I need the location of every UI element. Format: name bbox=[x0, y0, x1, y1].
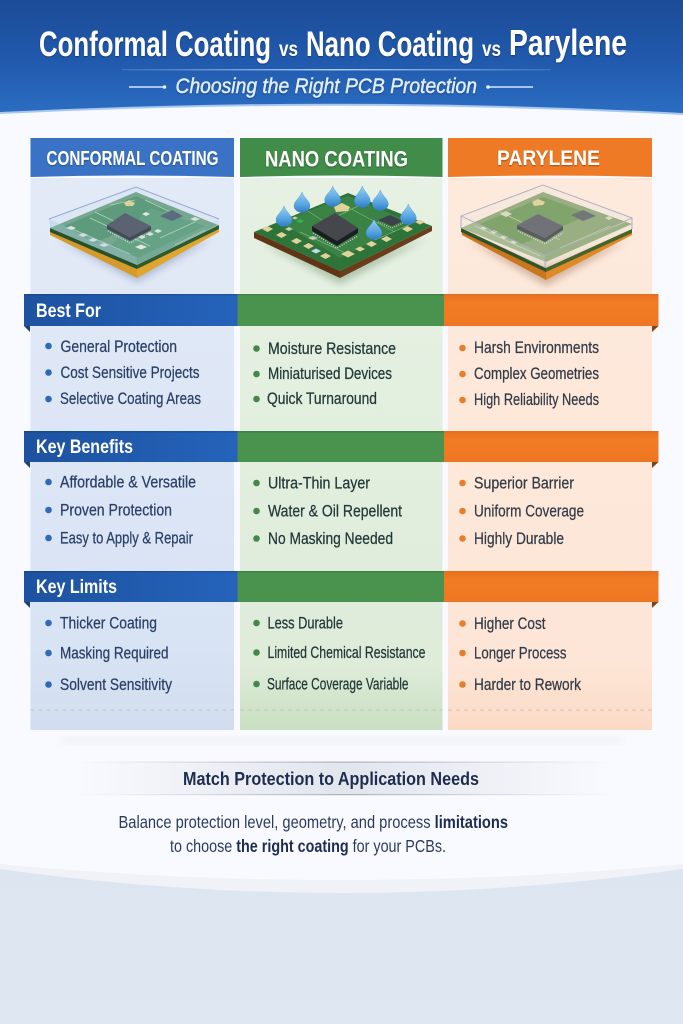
key benefits list: parylene: Highly Durable bbox=[474, 530, 564, 548]
key limits list: conformal coating: Thicker Coating bbox=[60, 614, 157, 632]
icon: conformal coated PCB bbox=[49, 187, 219, 282]
section band: best for: Best For bbox=[36, 300, 101, 322]
key limits list: nano coating: Surface Coverage Variable bbox=[267, 676, 408, 694]
best for list: conformal coating: General Protection bbox=[60, 338, 177, 356]
best for list: nano coating bbox=[253, 340, 396, 408]
key limits list: nano coating: Less Durable bbox=[268, 614, 343, 632]
key limits list: nano coating: Limited Chemical Resistance bbox=[268, 644, 426, 662]
section band: key benefits bbox=[24, 431, 658, 468]
key benefits list: parylene: Uniform Coverage bbox=[474, 502, 584, 520]
panel: nano coating column bbox=[240, 138, 442, 730]
section band: best for bbox=[24, 294, 658, 332]
footer heading: Match Protection to Application Needs bbox=[183, 769, 479, 789]
key limits list: conformal coating: Solvent Sensitivity bbox=[60, 676, 173, 694]
footer text: to choose the right coating for your PCBs. bbox=[170, 836, 446, 856]
title: vs bbox=[279, 38, 298, 61]
key limits list: parylene bbox=[459, 615, 582, 694]
footer text: Balance protection level, geometry, and process limitations bbox=[118, 812, 508, 832]
icon: nano coated PCB with water droplets bbox=[254, 186, 432, 284]
best for list: parylene bbox=[459, 339, 599, 409]
subtitle: Choosing the Right PCB Protection bbox=[176, 75, 477, 98]
section band: key benefits: Key Benefits bbox=[36, 436, 133, 458]
title: Conformal Coating bbox=[39, 25, 271, 64]
key benefits list: nano coating: No Masking Needed bbox=[268, 530, 393, 548]
best for list: parylene: Complex Geometries bbox=[474, 365, 599, 383]
panel: conformal coating column bbox=[30, 138, 234, 730]
key benefits list: conformal coating: Affordable & Versatile bbox=[60, 474, 196, 492]
key benefits list: conformal coating: Proven Protection bbox=[60, 502, 172, 520]
key benefits list: conformal coating bbox=[45, 474, 196, 548]
footer text bbox=[118, 812, 508, 856]
column heading: parylene: PARYLENE bbox=[497, 146, 600, 170]
section band: key limits: Key Limits bbox=[36, 576, 117, 598]
key benefits list: nano coating: Ultra-Thin Layer bbox=[268, 474, 370, 492]
key limits list: conformal coating: Masking Required bbox=[60, 644, 168, 662]
column heading: parylene bbox=[448, 138, 652, 177]
column heading: nano coating: NANO COATING bbox=[265, 146, 408, 172]
chip bbox=[107, 225, 151, 241]
chip bbox=[312, 226, 358, 246]
column heading: conformal coating bbox=[30, 138, 234, 177]
best for list: parylene: High Reliability Needs bbox=[474, 391, 599, 409]
best for list: nano coating: Moisture Resistance bbox=[268, 340, 396, 358]
icon: parylene coated PCB bbox=[461, 185, 632, 286]
column heading: nano coating bbox=[240, 138, 442, 177]
key limits list: parylene: Longer Process bbox=[474, 644, 566, 662]
key benefits list: parylene: Superior Barrier bbox=[474, 474, 574, 492]
water droplets bbox=[276, 186, 416, 240]
key benefits list: parylene bbox=[459, 474, 584, 548]
best for list: nano coating: Quick Turnaround bbox=[267, 390, 377, 408]
best for list: parylene: Harsh Environments bbox=[474, 339, 599, 357]
chip bbox=[517, 225, 563, 242]
best for list: nano coating: Miniaturised Devices bbox=[268, 365, 392, 383]
panel: parylene column bbox=[448, 138, 652, 730]
title: Nano Coating bbox=[306, 25, 474, 64]
key limits list: parylene: Harder to Rework bbox=[474, 676, 582, 694]
column heading: conformal coating: CONFORMAL COATING bbox=[46, 147, 218, 170]
bottom wave bbox=[0, 864, 683, 1024]
key benefits list: nano coating: Water & Oil Repellent bbox=[268, 502, 402, 520]
key limits list: nano coating bbox=[253, 614, 426, 694]
header banner bbox=[0, 0, 683, 115]
footer heading bbox=[75, 762, 615, 795]
title: Parylene bbox=[509, 22, 627, 63]
key benefits list: conformal coating: Easy to Apply & Repair bbox=[60, 530, 193, 548]
title: vs bbox=[482, 38, 501, 61]
key benefits list: nano coating bbox=[253, 474, 402, 548]
best for list: conformal coating: Selective Coating Areas bbox=[60, 390, 201, 408]
best for list: conformal coating: Cost Sensitive Projects bbox=[60, 364, 200, 382]
section band: key limits bbox=[24, 571, 658, 608]
best for list: conformal coating bbox=[45, 338, 201, 408]
title bbox=[39, 22, 627, 64]
key limits list: conformal coating bbox=[45, 614, 173, 694]
key limits list: parylene: Higher Cost bbox=[474, 615, 546, 633]
